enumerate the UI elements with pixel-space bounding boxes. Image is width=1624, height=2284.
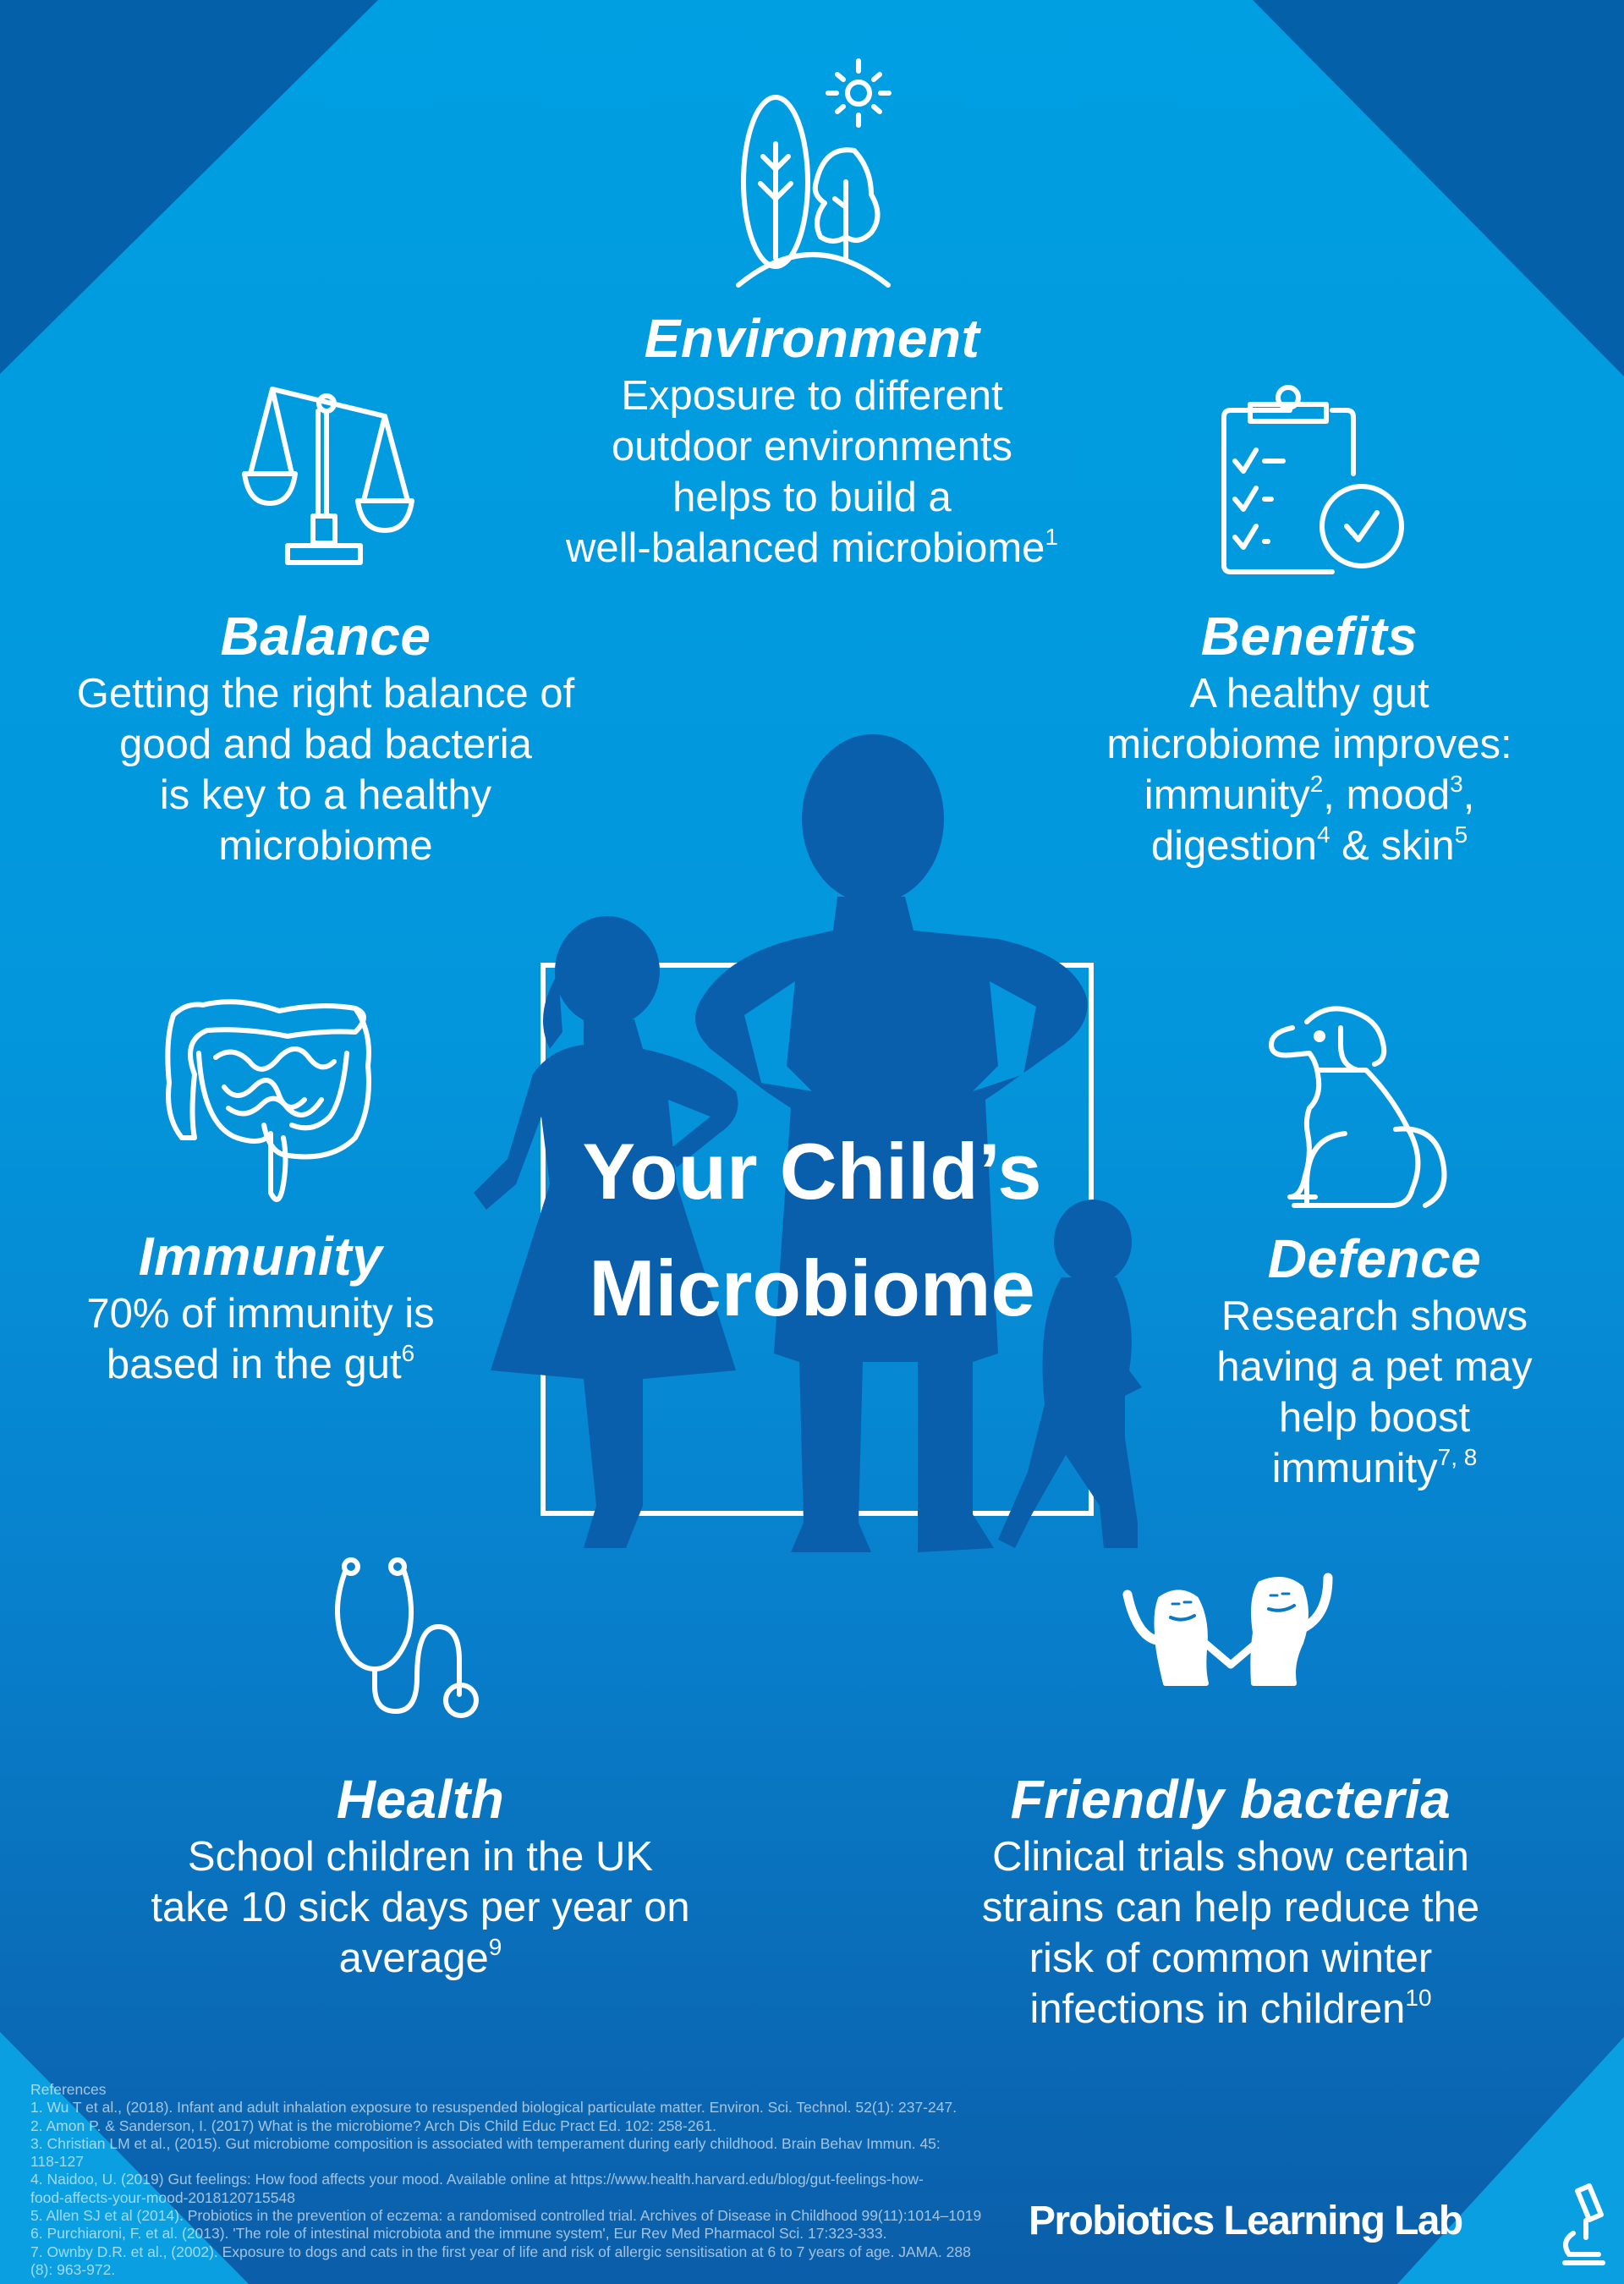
panel: benefits: immunity2, mood3, (1144, 771, 1474, 818)
icon: trees and sun (738, 61, 889, 285)
panel: benefits (1106, 606, 1512, 869)
panel: health: take 10 sick days per year on (151, 1885, 690, 1930)
panel: friendly bacteria: infections in children10 (1029, 1985, 1432, 2032)
icon: clipboard checklist (1224, 387, 1402, 572)
icon: microscope (1565, 2186, 1603, 2263)
panel: environment (565, 308, 1058, 571)
panel: environment: helps to build a (672, 475, 952, 520)
icon: balance scale (244, 389, 412, 563)
panel: balance (77, 606, 575, 869)
panel: balance: Balance (221, 606, 431, 667)
references: 1. Wu T et al., (2018). Infant and adult inhalation exposure to resuspended biological particulate matter. Environ. Sci. Technol. 52(1): 237-247. (30, 2099, 957, 2116)
panel: health: Health (337, 1769, 504, 1830)
references: 2. Amon P. & Sanderson, I. (2017) What is the microbiome? Arch Dis Child Educ Pract Ed. 102: 258-261. (30, 2117, 716, 2134)
panel: immunity (86, 1226, 435, 1387)
panel: defence: immunity7, 8 (1272, 1444, 1477, 1491)
panel: defence: having a pet may (1216, 1344, 1533, 1390)
panel: health (151, 1769, 690, 1981)
panel: benefits: digestion4 & skin5 (1151, 821, 1468, 869)
panel: balance: microbiome (218, 823, 433, 869)
references: (8): 963-972. (30, 2261, 115, 2278)
panel: defence: Research shows (1221, 1293, 1528, 1339)
references (30, 2081, 981, 2278)
toddler (998, 1200, 1142, 1548)
icon: intestines (167, 1002, 369, 1200)
panel: defence: help boost (1279, 1395, 1470, 1441)
boy (695, 734, 1088, 1552)
panel: friendly bacteria: strains can help reduce the (982, 1885, 1479, 1930)
references: References (30, 2081, 107, 2098)
references: 3. Christian LM et al., (2015). Gut microbiome composition is associated with temperament during early childhood. Brain Behav Immun. 45: (30, 2135, 941, 2152)
references: 7. Ownby D.R. et al., (2002). Exposure to dogs and cats in the first year of life and risk of allergic sensitisation at 6 to 7 years of age. JAMA. 288 (30, 2243, 971, 2260)
panel: balance: good and bad bacteria (119, 722, 532, 767)
girl (474, 916, 738, 1548)
references: 4. Naidoo, U. (2019) Gut feelings: How food affects your mood. Available online at https://www.health.harvard.edu/blog/gut-feelings-how- (30, 2171, 924, 2188)
references: 118-127 (30, 2153, 84, 2170)
main title: Your Child’s (582, 1127, 1042, 1216)
references: food-affects-your-mood-2018120715548 (30, 2189, 295, 2206)
logo text: Probiotics Learning Lab (1029, 2199, 1462, 2243)
panel: friendly bacteria (982, 1769, 1479, 2032)
panel: friendly bacteria: risk of common winter (1029, 1935, 1432, 1981)
references: 6. Purchiaroni, F. et al. (2013). 'The role of intestinal microbiota and the immune system', Eur Rev Med Pharmacol Sci. 17:323-333. (30, 2225, 886, 2242)
panel: benefits: microbiome improves: (1106, 722, 1512, 767)
panel: friendly bacteria: Clinical trials show certain (992, 1834, 1469, 1880)
icon: dog (1271, 1008, 1445, 1205)
panel: balance: Getting the right balance of (77, 671, 574, 716)
panel: benefits: A healthy gut (1189, 671, 1429, 716)
icon: stethoscope (337, 1560, 476, 1716)
panel: immunity: based in the gut6 (107, 1340, 414, 1387)
panel: environment: outdoor environments (612, 424, 1012, 469)
icon: friendly bacteria (1127, 1578, 1328, 1683)
main title (582, 1127, 1042, 1332)
panel: health: School children in the UK (188, 1834, 653, 1880)
panel: defence: Defence (1268, 1228, 1481, 1289)
references: 5. Allen SJ et al (2014). Probiotics in the prevention of eczema: a randomised controlled trial. Archives of Disease in Childhood 99(11):1014–1019 (30, 2207, 981, 2224)
panel: balance: is key to a healthy (160, 772, 491, 818)
panel: defence (1216, 1228, 1533, 1491)
main title: Microbiome (589, 1244, 1035, 1332)
panel: immunity: Immunity (139, 1226, 382, 1287)
panel: environment: Environment (645, 308, 979, 369)
central box frame (540, 963, 1094, 1516)
panel: environment: Exposure to different (621, 373, 1003, 419)
panel: immunity: 70% of immunity is (86, 1291, 435, 1337)
panel: friendly bacteria: Friendly bacteria (1011, 1769, 1451, 1830)
panel: environment: well-balanced microbiome1 (566, 524, 1058, 571)
panel: benefits: Benefits (1201, 606, 1418, 667)
panel: health: average9 (339, 1934, 502, 1981)
